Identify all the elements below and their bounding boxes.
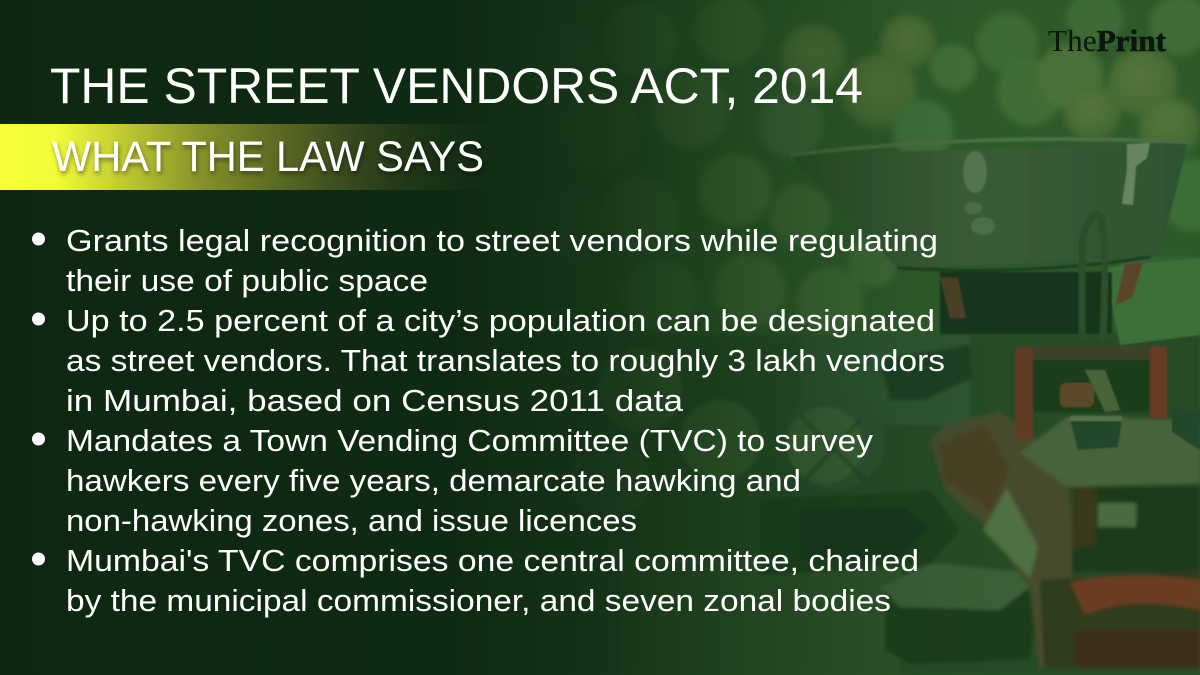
bullet 3: hawkers every five years, demarcate hawking and <box>66 463 801 498</box>
bullet 2: in Mumbai, based on Census 2011 data <box>66 383 684 418</box>
bullet 2: as street vendors. That translates to roughly 3 lakh vendors <box>66 343 945 378</box>
background photo: green apples <box>500 0 1200 340</box>
bullet 2 <box>32 303 945 418</box>
table <box>1020 417 1200 487</box>
parcel <box>885 590 1038 664</box>
red tank <box>1040 570 1200 675</box>
bullet 1: Grants legal recognition to street vendors while regulating <box>66 223 938 258</box>
title: THE STREET VENDORS ACT, 2014 <box>50 58 863 114</box>
background photo: lower stall <box>500 335 1200 675</box>
bullet list <box>32 223 945 618</box>
netted sack <box>785 390 885 490</box>
bullet 3: Mandates a Town Vending Committee (TVC) to survey <box>66 423 874 458</box>
bullet 3: non-hawking zones, and issue licences <box>66 503 637 538</box>
subtitle: WHAT THE LAW SAYS <box>52 133 484 181</box>
bullet 4 <box>32 543 919 618</box>
bullet 4: Mumbai's TVC comprises one central committee, chaired <box>66 543 919 578</box>
subtitle band <box>0 124 500 190</box>
bullet 1: their use of public space <box>66 263 428 298</box>
bullet 4: by the municipal commissioner, and seven zonal bodies <box>66 583 891 618</box>
leaves behind the scale <box>1105 258 1200 345</box>
cloth sack <box>930 412 1075 675</box>
background photo: weighing scale <box>790 139 1200 450</box>
bullet 3 <box>32 423 874 538</box>
logo: ThePrint: ThePrint <box>1048 23 1167 58</box>
bullet 1 <box>32 223 938 298</box>
bullet 2: Up to 2.5 percent of a city’s population can be designated <box>66 303 935 338</box>
